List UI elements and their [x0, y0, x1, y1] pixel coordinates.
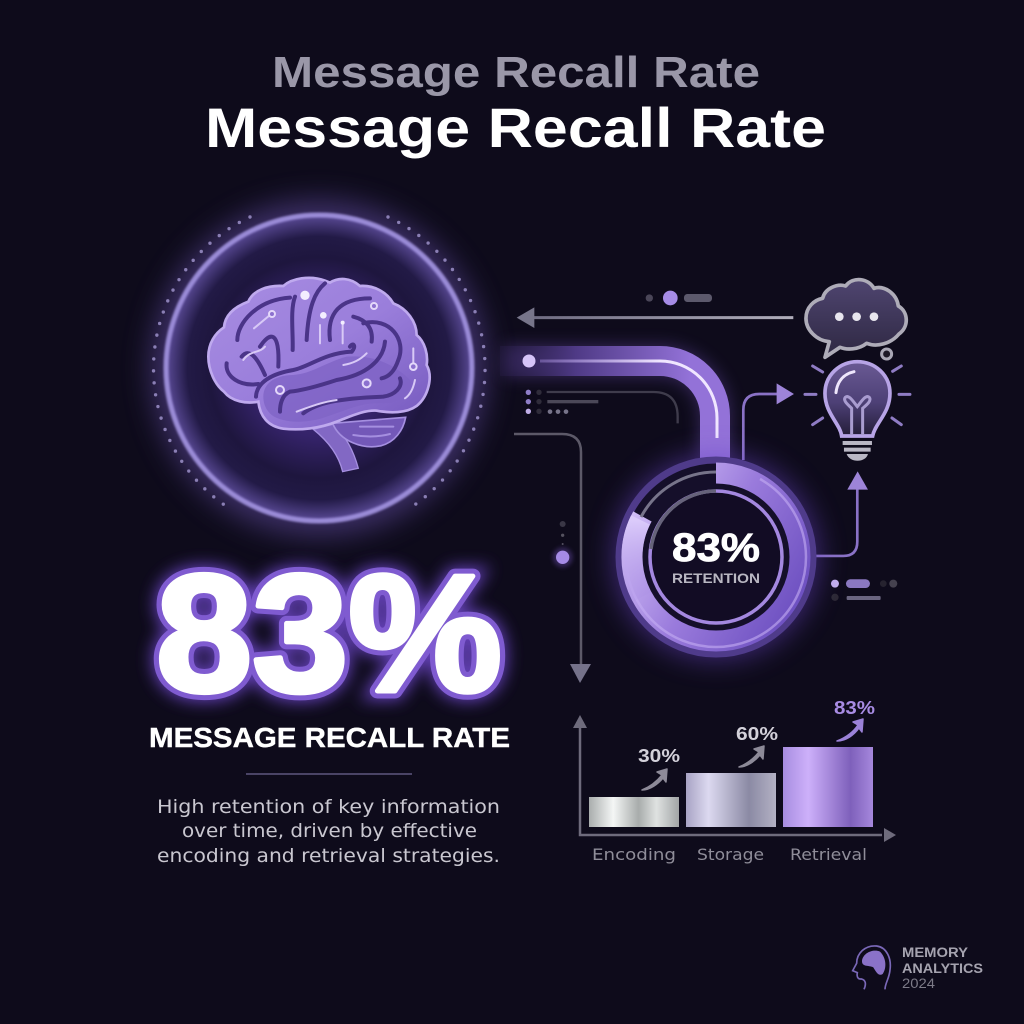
description — [157, 796, 500, 867]
category labels: Retrieval — [790, 845, 867, 864]
value labels: 30% — [638, 746, 680, 766]
logo text — [902, 945, 983, 991]
bulb rays — [805, 366, 910, 425]
pipe start dot — [522, 354, 536, 368]
inner ring — [650, 491, 782, 623]
dark folds — [227, 283, 401, 413]
83% progress arc — [632, 473, 800, 641]
description: encoding and retrieval strategies. — [157, 845, 500, 867]
title — [205, 48, 826, 159]
lobe highlight — [263, 356, 411, 422]
ring caption: RETENTION — [672, 571, 760, 586]
footer logo — [853, 945, 983, 991]
small ring — [882, 349, 892, 359]
icon: light bulb — [805, 362, 910, 461]
purple pipe connector — [500, 354, 717, 462]
icon: brain — [208, 278, 430, 472]
arrow to light bulb — [743, 383, 794, 460]
status dots and bars — [526, 390, 598, 414]
circuit traces — [243, 315, 415, 412]
thin bracket lines and small details — [517, 280, 910, 601]
icon: head with brain — [853, 946, 890, 989]
bar: retrieval — [783, 747, 873, 827]
bar chart — [573, 698, 896, 864]
value outline: 83% — [156, 541, 502, 727]
logo text: MEMORY — [902, 945, 968, 960]
logo text: 2024 — [902, 976, 936, 991]
main title line: Message Recall Rate — [205, 96, 826, 159]
upper bracket line — [547, 392, 678, 423]
logo text: ANALYTICS — [902, 961, 983, 976]
arrow from ring up to bulb — [815, 471, 868, 556]
left vertical dots — [553, 521, 573, 567]
axes — [573, 715, 896, 842]
metric label: MESSAGE RECALL RATE — [149, 722, 510, 753]
cerebrum — [208, 278, 430, 429]
arc rim highlight — [626, 479, 806, 647]
lower right indicators — [831, 579, 897, 601]
value labels: 83% — [834, 698, 875, 718]
trend arrows — [642, 719, 863, 790]
bar: encoding — [589, 797, 679, 827]
value labels — [638, 698, 875, 766]
cerebellum — [333, 417, 406, 447]
long bracket arrow to chart — [514, 434, 591, 683]
ring value: 83% — [672, 526, 760, 570]
faded title line: Message Recall Rate — [272, 48, 760, 97]
top left arrow — [517, 307, 793, 328]
category labels — [592, 845, 867, 864]
icon: thought cloud — [806, 280, 906, 357]
bar: storage — [686, 773, 776, 827]
top indicator dots — [646, 291, 712, 305]
gray remainder track — [641, 472, 716, 517]
description: over time, driven by effective — [182, 820, 477, 842]
value labels: 60% — [736, 724, 778, 744]
value number: 83% — [156, 541, 502, 727]
description: High retention of key information — [157, 796, 500, 818]
retention ring gauge — [614, 455, 818, 659]
particle dots — [154, 217, 485, 510]
brain emblem circle — [151, 200, 487, 536]
category labels: Encoding — [592, 845, 676, 864]
category labels: Storage — [697, 845, 764, 864]
brain stem — [313, 424, 358, 472]
value glow: 83% — [156, 541, 502, 727]
arc end highlight — [632, 520, 642, 597]
big 83% value — [156, 541, 502, 727]
